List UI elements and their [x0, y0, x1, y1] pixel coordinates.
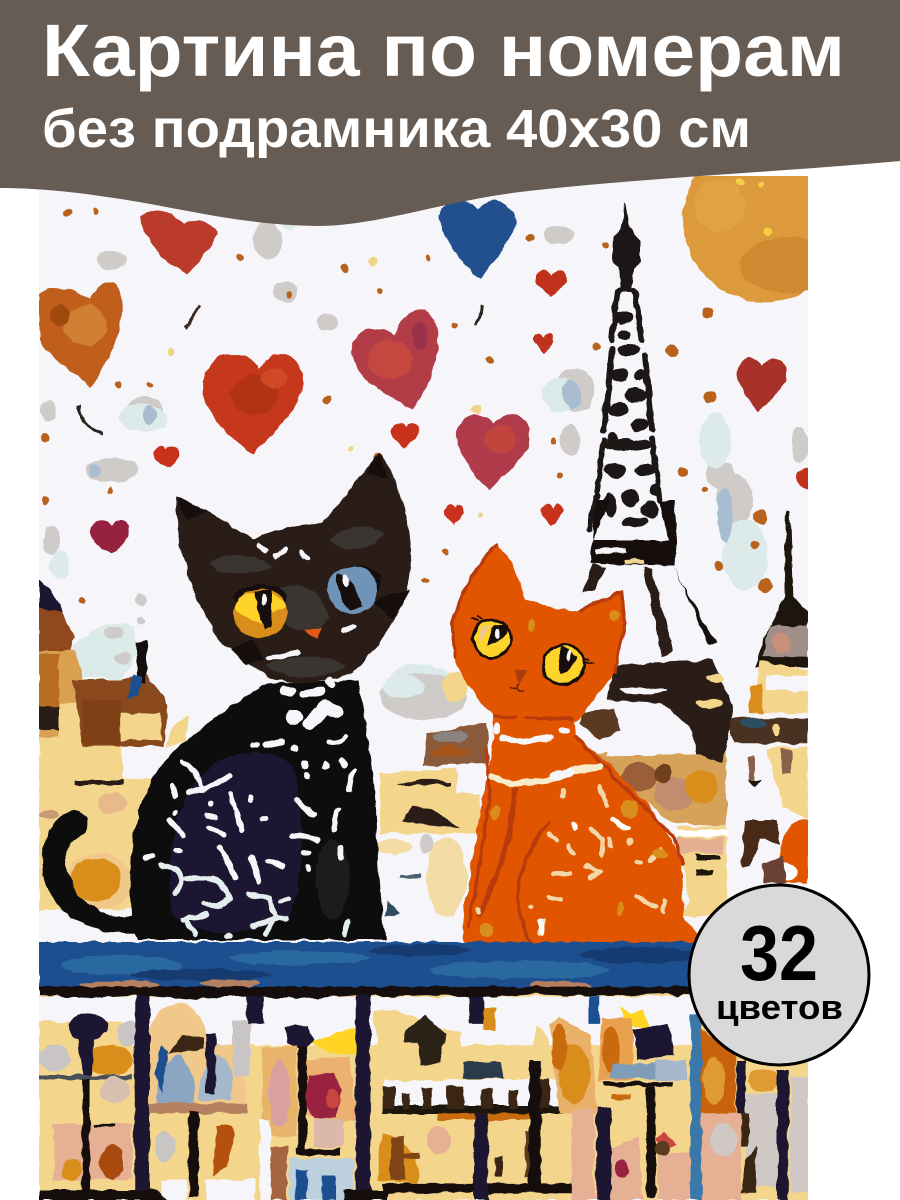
moon — [683, 138, 847, 302]
heart: red top left — [140, 211, 218, 275]
markings — [480, 727, 663, 933]
panel: painting — [38, 138, 847, 1200]
head — [452, 543, 626, 725]
eiffel lower section — [580, 500, 733, 763]
top dark rail — [39, 987, 697, 999]
confetti specks — [41, 199, 772, 624]
hearts — [39, 200, 819, 554]
badge label: цветов — [716, 989, 843, 1027]
pale paint clouds — [40, 214, 809, 704]
white markings — [146, 545, 354, 935]
column one — [38, 1013, 137, 1197]
right eye — [327, 566, 378, 614]
nose — [305, 627, 322, 639]
heart: blue — [439, 200, 516, 280]
head shading — [209, 527, 384, 677]
nose and mouth — [515, 670, 527, 683]
stray dark strokes — [78, 305, 483, 433]
heart: large red — [203, 354, 303, 455]
outline strokes — [453, 545, 683, 950]
body — [130, 680, 386, 940]
column five — [550, 1017, 596, 1200]
lower city — [38, 987, 809, 1200]
head — [176, 452, 411, 683]
black cat — [42, 452, 411, 940]
city behind cats, left side — [39, 580, 190, 911]
left eye — [472, 617, 510, 658]
subtitle: без подрамника 40х30 см — [42, 99, 751, 159]
right spire dome — [727, 510, 808, 743]
orange cat — [452, 543, 700, 950]
heart: crimson right — [457, 414, 530, 491]
header banner — [0, 0, 900, 226]
column four — [373, 1008, 574, 1193]
heart: right — [737, 358, 787, 412]
eiffel tower — [590, 203, 672, 540]
badge number: 32 — [740, 909, 818, 997]
city behind cats, right side — [375, 510, 808, 927]
badge: 32 colours — [689, 885, 869, 1065]
column two — [145, 1003, 255, 1200]
belly patch — [170, 752, 302, 932]
heart: orange left — [39, 282, 122, 388]
blue ledge — [39, 940, 694, 989]
right eye — [543, 646, 593, 684]
body — [462, 717, 700, 950]
column three — [260, 1025, 358, 1200]
column six — [594, 1007, 692, 1200]
column seven — [697, 1027, 809, 1200]
left eye — [234, 588, 287, 638]
dark pillars — [142, 993, 783, 1200]
tail — [42, 810, 146, 934]
title: Картина по номерам — [42, 9, 845, 92]
heart: crimson centre — [352, 310, 438, 410]
small hearts — [91, 270, 819, 554]
